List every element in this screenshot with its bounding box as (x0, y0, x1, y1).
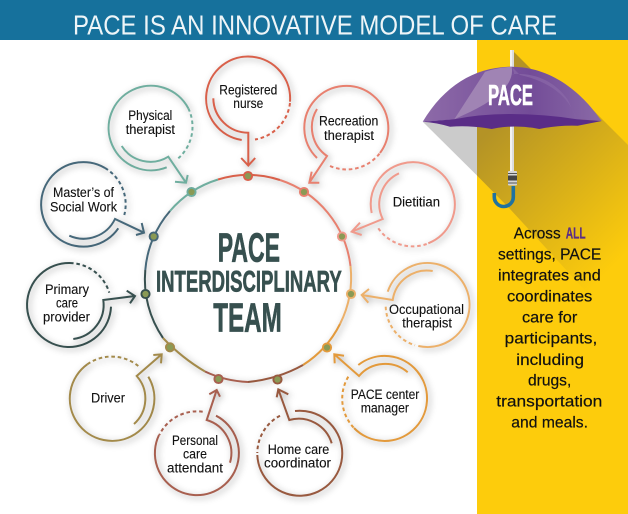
bubble: home care coordinator: coordinator (264, 456, 331, 471)
bubble: personal care attendant: Personal (172, 433, 218, 448)
bubble: PACE center manager: PACE center (351, 387, 420, 402)
text block: sidebar description: drugs, (528, 373, 571, 390)
text block: sidebar description: coordinates (507, 289, 592, 306)
title banner: PACE IS AN INNOVATIVE MODEL OF CARE (73, 10, 557, 40)
bubble: registered nurse (206, 56, 290, 165)
panel: yellow sidebar (477, 40, 628, 514)
text block: sidebar description: participants, (505, 331, 597, 348)
text block: sidebar description: transportation (496, 394, 602, 411)
bubble: occupational therapist (362, 263, 470, 347)
bubble: physical therapist (109, 86, 193, 183)
heading: PACE interdisciplinary team (156, 225, 342, 341)
bubble: primary care provider: provider (43, 310, 90, 325)
bubble: occupational therapist: therapist (402, 316, 452, 331)
bubble: physical therapist: Physical (128, 108, 172, 123)
icon: PACE umbrella: PACE (488, 80, 533, 112)
bubble: driver: Driver (91, 391, 125, 406)
text block: sidebar description: Across (514, 225, 561, 242)
central ring (145, 175, 351, 382)
text block: sidebar description: ALL (566, 225, 586, 242)
bubble: registered nurse: Registered (219, 82, 277, 97)
bubble: primary care provider: care (56, 296, 78, 311)
text block: sidebar description: care for (522, 309, 578, 326)
bubble: registered nurse: nurse (233, 96, 263, 111)
heading: PACE interdisciplinary team: TEAM (213, 295, 282, 341)
bubble: PACE center manager (334, 354, 427, 441)
text block: sidebar description (496, 225, 602, 432)
bubble: physical therapist: therapist (126, 122, 175, 137)
text block: sidebar description: including (516, 352, 584, 369)
bubble: recreation therapist: Recreation (319, 114, 378, 129)
bubble: home care coordinator (257, 389, 342, 496)
bubble: personal care attendant (155, 390, 239, 495)
bubble: recreation therapist: therapist (324, 128, 374, 143)
bubble: PACE center manager: manager (361, 401, 409, 416)
icon: PACE umbrella (423, 50, 628, 337)
bubble: dietitian: Dietitian (393, 195, 440, 210)
bubble: recreation therapist (304, 86, 388, 183)
bubble: master's of social work: Social Work (50, 200, 117, 215)
ring connection dots (141, 172, 355, 384)
text block: sidebar description: integrates and (498, 268, 601, 285)
bubble: home care coordinator: Home care (268, 442, 329, 457)
bubble: primary care provider: Primary (45, 282, 89, 297)
bubble: dietitian (352, 162, 455, 246)
bubble: master's of social work (41, 162, 144, 247)
bubble: personal care attendant: attendant (167, 460, 223, 475)
bubble: primary care provider (27, 263, 135, 347)
bubble: driver (70, 354, 162, 441)
bubble: occupational therapist: Occupational (389, 302, 464, 317)
bubble: master's of social work: Master’s of (53, 185, 114, 200)
bubble: personal care attendant: care (183, 447, 207, 462)
heading: PACE interdisciplinary team: PACE (218, 225, 280, 271)
heading: PACE interdisciplinary team: INTERDISCIPLINARY (156, 266, 342, 299)
title banner (0, 0, 628, 40)
text block: sidebar description: and meals. (511, 415, 588, 432)
text block: sidebar description: settings, PACE (498, 246, 601, 263)
